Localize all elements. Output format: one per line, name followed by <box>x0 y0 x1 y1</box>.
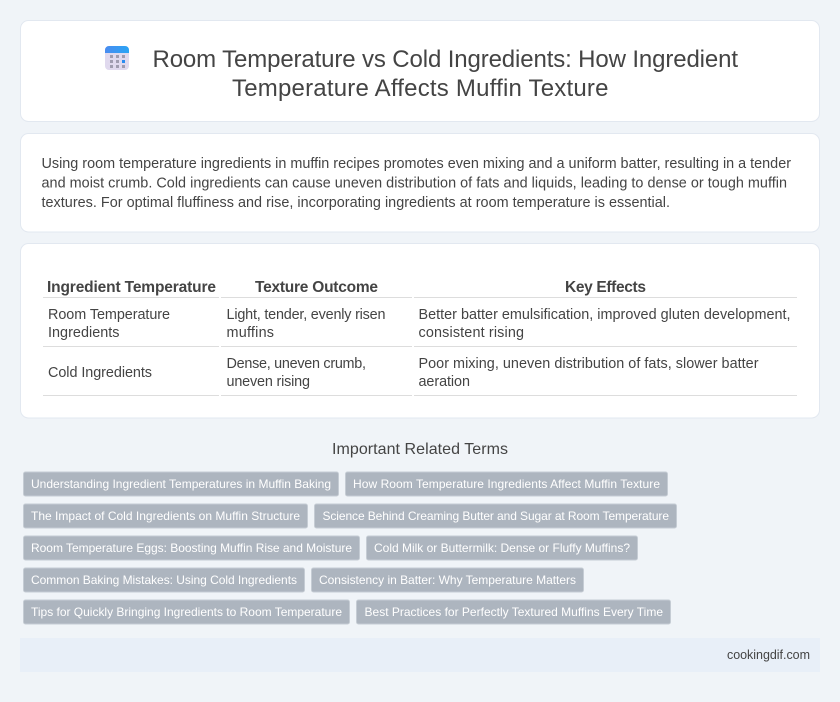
table row: cold ingredients: uneven rising <box>226 374 310 390</box>
tag: understanding ingredient temperatures: Understanding Ingredient Temperatures in Muffin Baking <box>31 477 331 491</box>
table header row: Ingredient Temperature <box>47 279 216 296</box>
heading: important related terms: Important Related Terms <box>332 441 508 458</box>
table row: room temperature ingredients: Light, tender, evenly risen <box>226 307 386 323</box>
tag: cold milk or buttermilk <box>366 536 638 560</box>
panel: introduction <box>20 134 820 232</box>
tag: room temperature eggs <box>24 536 360 560</box>
text block: introduction paragraph: Using room temperature ingredients in muffin recipes promotes even mixing and a uniform batter, resulting in a tender <box>42 156 791 172</box>
tag: science behind creaming: Science Behind Creaming Butter and Sugar at Room Temperature <box>322 509 669 523</box>
table row: room temperature ingredients: muffins <box>226 325 274 341</box>
table row: cold ingredients: aeration <box>418 374 470 390</box>
panel: comparison table <box>20 244 820 418</box>
tag: tips for quickly bringing ingredients <box>24 600 350 624</box>
icon: calendar <box>105 46 129 70</box>
tag: tips for quickly bringing ingredients: Tips for Quickly Bringing Ingredients to Room Temperature <box>31 605 342 619</box>
tag: understanding ingredient temperatures <box>24 472 338 496</box>
table row: room temperature ingredients: Better batter emulsification, improved gluten development, <box>418 307 790 323</box>
table row: cold ingredients: Cold Ingredients <box>48 365 152 381</box>
tag: room temperature eggs: Room Temperature Eggs: Boosting Muffin Rise and Moisture <box>31 541 352 555</box>
tag: consistency in batter: Consistency in Batter: Why Temperature Matters <box>319 573 576 587</box>
table row: cold ingredients <box>43 356 797 396</box>
tag: how room temperature ingredients affect texture <box>346 472 668 496</box>
title <box>152 46 738 102</box>
table row: room temperature ingredients <box>43 307 797 347</box>
text block: introduction paragraph <box>42 156 791 211</box>
table row: cold ingredients: Dense, uneven crumb, <box>226 356 366 372</box>
table row: room temperature ingredients: Ingredients <box>48 325 120 341</box>
tag: consistency in batter <box>312 568 584 592</box>
tag: cold milk or buttermilk: Cold Milk or Buttermilk: Dense or Fluffy Muffins? <box>374 541 630 555</box>
footer source text: cookingdif.com <box>727 648 810 662</box>
tag: science behind creaming <box>314 504 676 528</box>
tag: how room temperature ingredients affect texture: How Room Temperature Ingredients Affect Muffin Texture <box>353 477 660 491</box>
tag: best practices <box>356 600 670 624</box>
table header row: Texture Outcome <box>255 279 378 296</box>
tag: impact of cold ingredients <box>24 504 308 528</box>
table header row: Key Effects <box>565 279 646 296</box>
table row: cold ingredients: Poor mixing, uneven distribution of fats, slower batter <box>418 356 759 372</box>
table row: room temperature ingredients: Room Temperature <box>48 307 170 323</box>
tag: best practices: Best Practices for Perfectly Textured Muffins Every Time <box>364 605 663 619</box>
panel: related terms tags <box>24 472 676 624</box>
table row: room temperature ingredients: consistent rising <box>418 325 524 341</box>
tag: common baking mistakes: Common Baking Mistakes: Using Cold Ingredients <box>31 573 297 587</box>
footer <box>20 638 820 672</box>
title: Room Temperature vs Cold Ingredients: How Ingredient <box>152 46 738 73</box>
table header row <box>43 279 797 298</box>
text block: introduction paragraph: and moist crumb. Cold ingredients can cause uneven distribution of fats and liquids, leading to dense or tough muffin <box>42 176 787 192</box>
text block: introduction paragraph: textures. For optimal fluffiness and rise, incorporating ingredients at room temperature is essential. <box>42 195 670 211</box>
tag: common baking mistakes <box>24 568 304 592</box>
tag: impact of cold ingredients: The Impact of Cold Ingredients on Muffin Structure <box>31 509 300 523</box>
title: Temperature Affects Muffin Texture <box>232 75 608 102</box>
panel: title header <box>20 20 820 122</box>
